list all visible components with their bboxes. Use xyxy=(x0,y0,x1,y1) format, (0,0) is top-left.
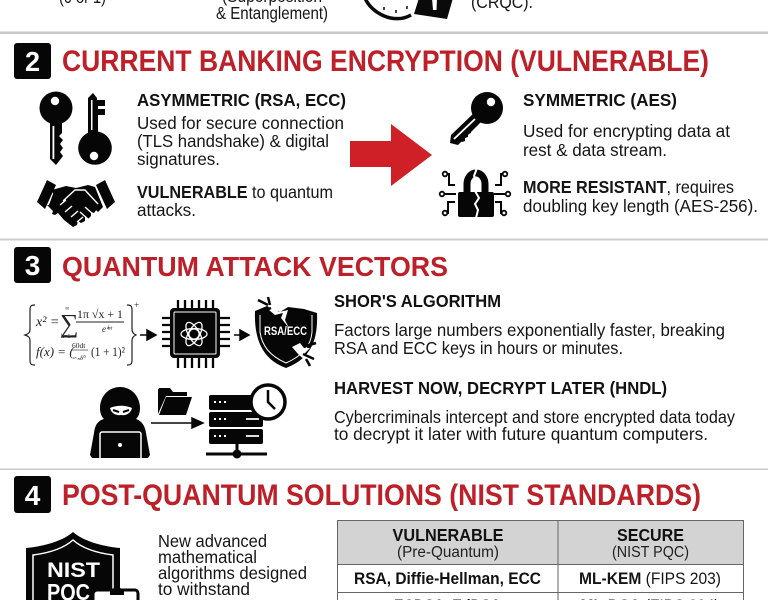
text: asymmetric description: signatures. xyxy=(137,149,220,169)
icon: cracked circuit padlock xyxy=(440,168,510,218)
text: vulnerable note xyxy=(137,182,333,220)
formula: math equations: ∽ₙδ⁰ xyxy=(72,354,86,362)
badge: number 2: 2 xyxy=(25,46,40,77)
icon: NIST PQC shield with clipboard xyxy=(26,532,138,600)
text: PQC description xyxy=(158,531,307,599)
formula: math equations: 1π √x + 1 xyxy=(77,307,123,321)
formula: math equations: (1 + 1)² xyxy=(91,344,125,359)
text: more resistant note: MORE RESISTANT, requires xyxy=(523,177,734,197)
badge: number 4: 4 xyxy=(25,480,41,511)
table: vulnerable versus secure algorithms xyxy=(338,520,744,600)
text: PQC description: mathematical xyxy=(158,547,257,567)
text: vulnerable note: attacks. xyxy=(137,200,196,220)
formula: math equations: ∞ xyxy=(65,306,69,312)
table row: key exchange: ML-KEM (FIPS 203) xyxy=(579,569,721,588)
icon: NIST PQC shield with clipboard: NIST xyxy=(47,559,100,582)
text: asymmetric heading: ASYMMETRIC (RSA, ECC) xyxy=(137,90,346,110)
arrow: folder transfer to server xyxy=(151,418,203,428)
formula: math equations: ∑ xyxy=(60,309,79,338)
text: PQC description: algorithms designed xyxy=(158,563,307,583)
heading: section 2: CURRENT BANKING ENCRYPTION (VULNERABLE) xyxy=(62,45,709,78)
heading: section 3: QUANTUM ATTACK VECTORS xyxy=(62,251,448,282)
arrow: red arrow to symmetric xyxy=(350,124,432,186)
text: asymmetric description: Used for secure connection xyxy=(137,113,344,133)
text: symmetric description: rest & data stream. xyxy=(523,140,667,160)
icon: folder xyxy=(158,388,192,415)
icon: server stack with clock xyxy=(206,385,285,458)
badge: number 4 xyxy=(14,476,51,513)
section 1 remnant: cropped top row xyxy=(59,0,533,23)
text: asymmetric description: (TLS handshake) & digital xyxy=(137,131,329,151)
table row: signatures xyxy=(394,596,720,600)
table header: (NIST PQC) xyxy=(612,544,689,561)
icon: broken RSA/ECC shield xyxy=(255,297,317,368)
text: Shor's description: RSA and ECC keys in hours or minutes. xyxy=(334,338,623,358)
icon: hooded hacker with laptop xyxy=(90,387,150,458)
arrow: chip to shield xyxy=(234,330,249,340)
text: HNDL description: Cybercriminals intercept and store encrypted data today xyxy=(334,407,735,427)
text: PQC description: to withstand xyxy=(158,579,250,599)
formula: math equations: eⁱⁿᵗ xyxy=(102,324,112,334)
panel: section 3 quantum attack vectors xyxy=(14,247,735,458)
icon: single key xyxy=(450,92,503,145)
formula: math equations: k=1 xyxy=(61,334,70,340)
text: PQC description: New advanced xyxy=(158,531,267,551)
table header: VULNERABLE xyxy=(392,525,504,545)
text: more resistant note: doubling key length (AES-256). xyxy=(523,196,758,216)
formula: math equations: 60dt xyxy=(72,341,86,350)
text: HNDL description xyxy=(334,407,735,444)
icon: broken RSA/ECC shield: RSA/ECC xyxy=(264,324,307,338)
formula: math equations: x² = xyxy=(35,315,59,330)
formula: math equations: + xyxy=(134,300,139,310)
icon: quantum chip xyxy=(162,300,230,368)
text: symmetric description xyxy=(523,121,730,160)
text: Shor's description: Factors large numbers exponentially faster, breaking xyxy=(334,320,725,340)
badge: number 3: 3 xyxy=(25,250,40,281)
text: Shor's algorithm heading: SHOR'S ALGORITHM xyxy=(334,291,501,311)
text: more resistant note xyxy=(523,177,758,216)
table row: key exchange: RSA, Diffie-Hellman, ECC xyxy=(354,569,541,588)
text: superposition caption: & Entanglement) xyxy=(216,3,328,23)
text: Shor's description xyxy=(334,320,725,358)
arrow: math to chip xyxy=(140,330,156,340)
text: vulnerable note: VULNERABLE to quantum xyxy=(137,182,333,202)
panel: section 2 current banking encryption xyxy=(14,43,758,227)
icon: clock and padlock xyxy=(365,0,453,19)
text: symmetric heading: SYMMETRIC (AES) xyxy=(523,90,677,110)
icon: pair of keys xyxy=(40,92,112,165)
heading: section 4: POST-QUANTUM SOLUTIONS (NIST STANDARDS) xyxy=(62,479,701,512)
badge: number 3 xyxy=(14,247,51,283)
formula: math equations xyxy=(25,300,139,365)
table header: SECURE xyxy=(617,525,684,545)
formula: math equations: f(x) = ( xyxy=(36,344,74,359)
icon: handshake xyxy=(37,180,115,227)
badge: number 2 xyxy=(14,43,51,79)
text: asymmetric description xyxy=(137,113,344,169)
table header xyxy=(338,520,744,564)
text: HNDL description: to decrypt it later with future quantum computers. xyxy=(334,424,708,444)
panel: section 4 post-quantum solutions xyxy=(14,476,744,600)
table row: key exchange xyxy=(354,569,721,588)
text: HNDL heading: HARVEST NOW, DECRYPT LATER (HNDL) xyxy=(334,378,667,398)
text: symmetric description: Used for encrypting data at xyxy=(523,121,730,141)
table header: (Pre-Quantum) xyxy=(397,544,499,561)
